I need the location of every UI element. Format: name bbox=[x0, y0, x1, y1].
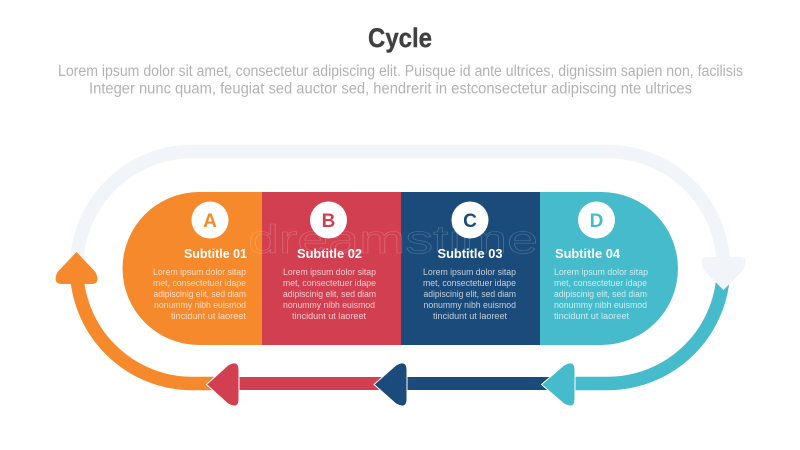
body text 03 bbox=[423, 267, 516, 321]
body text 01: adipiscinig elit, sed diam bbox=[154, 289, 246, 299]
description text bbox=[58, 63, 743, 98]
body text 03: tincidunt ut laoreet bbox=[433, 311, 508, 321]
panel: B red bbox=[262, 192, 401, 345]
subtitle 01: Subtitle 01 bbox=[184, 247, 247, 261]
arrowhead: light grey bbox=[701, 257, 746, 290]
body text 02: adipiscinig elit, sed diam bbox=[283, 289, 376, 299]
icon: letter A badge: A bbox=[203, 211, 217, 232]
arrow: navy C bbox=[374, 363, 553, 406]
title: Cycle bbox=[368, 23, 432, 53]
panel: C navy bbox=[401, 192, 540, 345]
body text 03: met, consectetuer idape bbox=[423, 278, 516, 288]
icon: letter C badge: C bbox=[463, 211, 477, 232]
icon: letter D badge bbox=[578, 202, 615, 238]
description text: Integer nunc quam, feugiat sed auctor sed, hendrerit in estconsectetur adipiscing nte ultrices bbox=[89, 80, 692, 98]
icon: letter B badge: B bbox=[322, 211, 335, 232]
arrow: orange A bbox=[56, 252, 215, 384]
subtitle 03: Subtitle 03 bbox=[438, 247, 503, 261]
body text 01: nonummy nibh euismod bbox=[154, 300, 246, 310]
icon: letter D badge: D bbox=[590, 211, 603, 232]
body text 01 bbox=[153, 267, 247, 321]
body text 04: adipiscinig elit, sed diam bbox=[554, 289, 647, 299]
body text 01: Lorem ipsum dolor sitap bbox=[153, 267, 246, 277]
arrow: red B bbox=[206, 363, 385, 406]
subtitle 02: Subtitle 02 bbox=[297, 247, 362, 261]
watermark: dreamstime bbox=[248, 218, 538, 262]
arrow: light grey top track bbox=[76, 152, 724, 268]
arrow: teal D bbox=[542, 268, 724, 406]
body text 02: met, consectetuer idape bbox=[283, 278, 376, 288]
icon: letter B badge bbox=[310, 202, 347, 238]
body text 01: tincidunt ut laoreet bbox=[171, 311, 247, 321]
body text 02 bbox=[283, 267, 376, 321]
body text 03: Lorem ipsum dolor sitap bbox=[423, 267, 516, 277]
body text 04: nonummy nibh euismod bbox=[554, 300, 647, 310]
panel: A orange bbox=[123, 192, 262, 345]
cycle arrows bbox=[56, 152, 746, 406]
panel: D teal bbox=[540, 192, 678, 345]
icon: letter C badge bbox=[452, 202, 488, 238]
body text 02: tincidunt ut laoreet bbox=[292, 311, 367, 321]
body text 02: Lorem ipsum dolor sitap bbox=[283, 267, 376, 277]
body text 04: tincidunt ut laoreet bbox=[554, 311, 630, 321]
icon: letter A badge bbox=[192, 202, 228, 238]
description text: Lorem ipsum dolor sit amet, consectetur adipiscing elit. Puisque id ante ultrices, dignissim sapien non, facilisis bbox=[58, 63, 743, 80]
body text 02: nonummy nibh euismod bbox=[283, 300, 375, 310]
body text 04: met, consectetuer idape bbox=[554, 278, 647, 288]
subtitle 04: Subtitle 04 bbox=[555, 247, 620, 261]
body text 04 bbox=[554, 267, 648, 321]
body text 01: met, consectetuer idape bbox=[153, 278, 246, 288]
body text 03: nonummy nibh euismod bbox=[424, 300, 516, 310]
body text 04: Lorem ipsum dolor sitap bbox=[554, 267, 648, 277]
body text 03: adipiscinig elit, sed diam bbox=[424, 289, 516, 299]
